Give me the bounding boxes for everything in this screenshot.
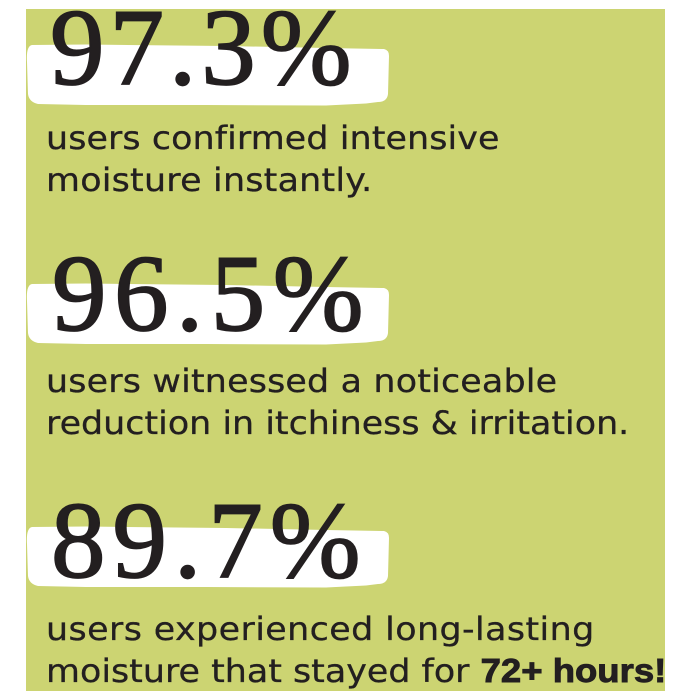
- caption 3: [46, 610, 666, 690]
- brush highlight 3: [26, 526, 389, 588]
- caption 1: users confirmed intensive: [46, 119, 500, 157]
- caption 2: [46, 362, 629, 442]
- caption 1: moisture instantly.: [46, 161, 372, 199]
- caption 2: reduction in itchiness & irritation.: [46, 404, 629, 442]
- number 96.5%: 96.5%: [52, 233, 371, 354]
- caption 3: users experienced long-lasting: [46, 610, 595, 648]
- caption 2: users witnessed a noticeable: [46, 362, 557, 400]
- stat block: 97.3%: [26, 0, 500, 199]
- caption 1: [46, 119, 500, 199]
- number 89.7%: 89.7%: [51, 480, 368, 601]
- brush highlight 2: [26, 284, 389, 344]
- caption 3: moisture that stayed for 72+ hours!: [46, 652, 666, 690]
- stat block: 96.5%: [26, 233, 629, 442]
- brush highlight 1: [26, 44, 389, 106]
- stat block: 89.7%: [26, 480, 666, 690]
